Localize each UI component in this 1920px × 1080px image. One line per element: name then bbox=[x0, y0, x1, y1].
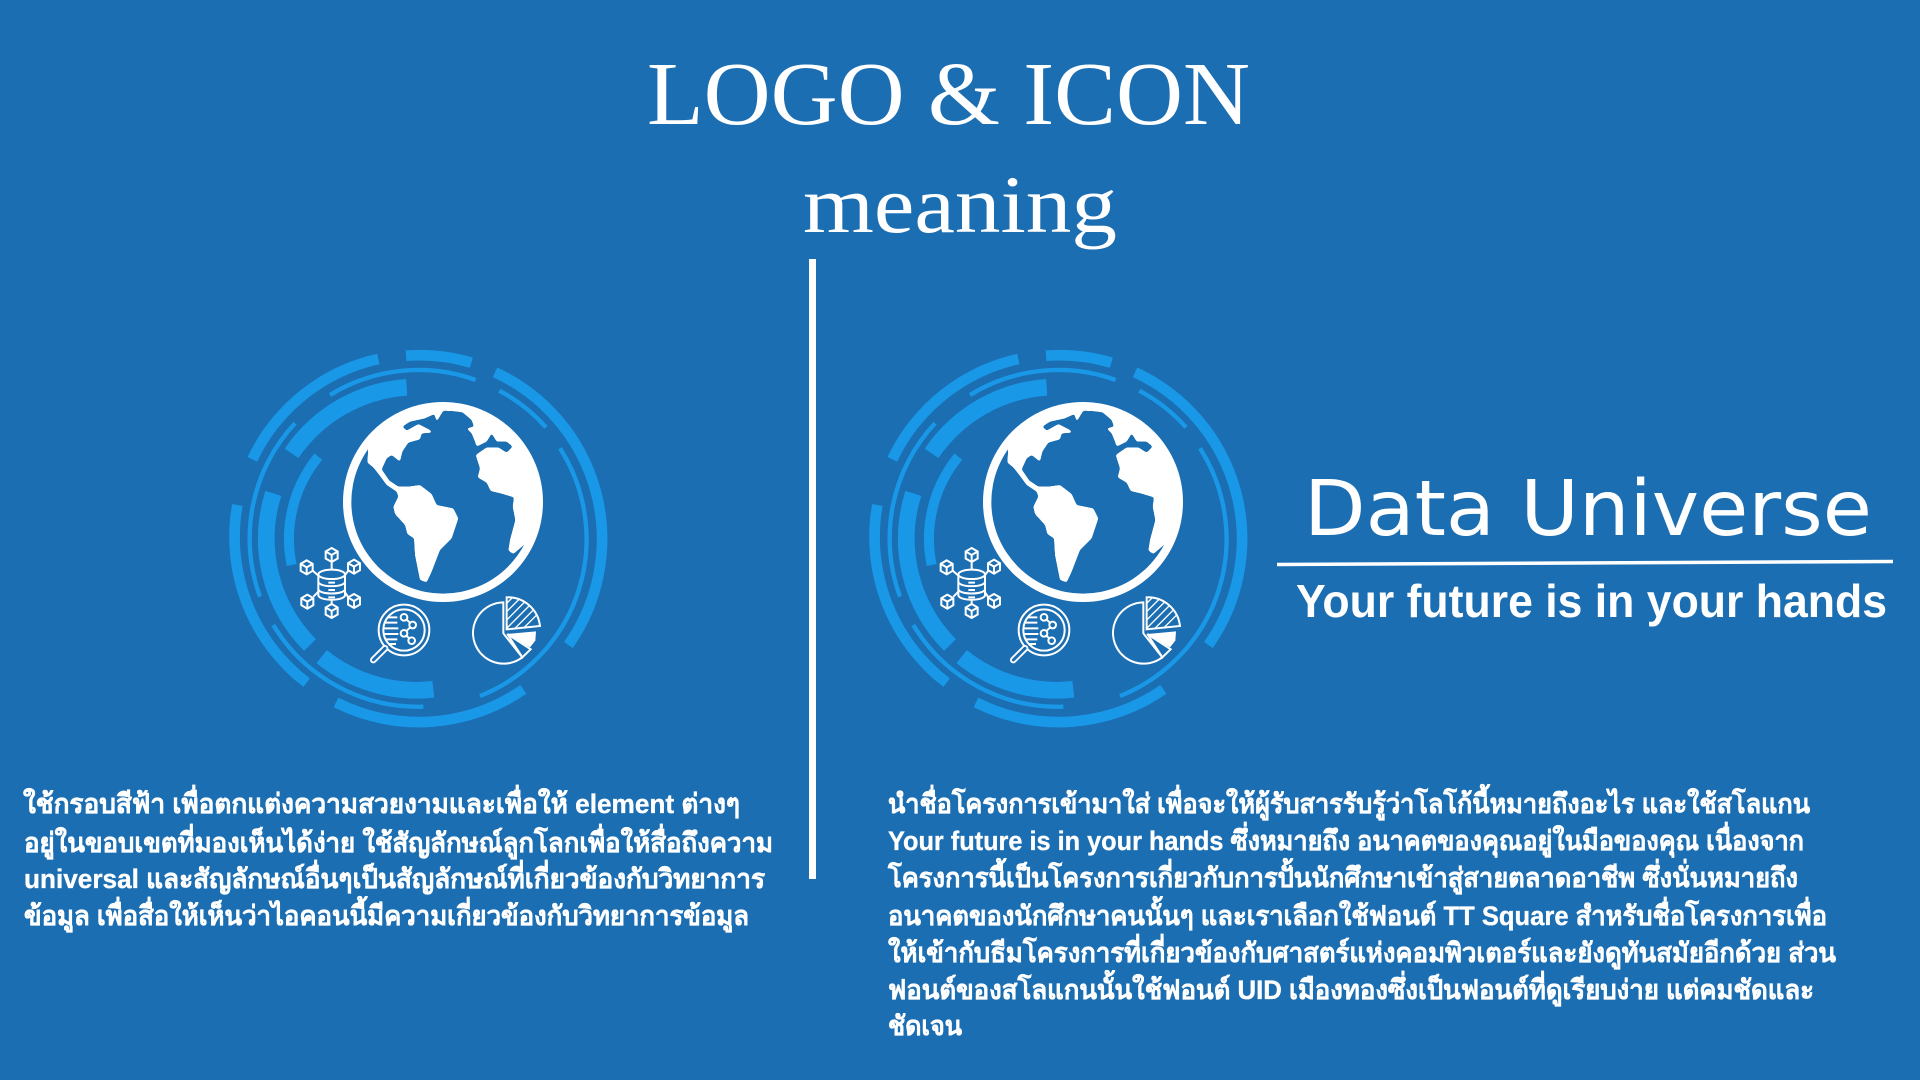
tech rings bbox=[235, 355, 602, 722]
text block: logo explanation: ฟอนต์ของสโลแกนนั้นใช้ฟอนต์ UID เมืองทองซึ่งเป็นฟอนต์ที่ดูเรียบง่าย แต่คมชัดและ bbox=[888, 969, 1814, 1007]
text block: icon explanation: อยู่ในขอบเขตที่มองเห็นได้ง่าย ใช้สัญลักษณ์ลูกโลกเพื่อให้สื่อถึงความ bbox=[24, 823, 773, 860]
icon: database network bbox=[301, 548, 360, 618]
text block: logo explanation: ให้เข้ากับธีมโครงการที่เกี่ยวข้องกับศาสตร์แห่งคอมพิวเตอร์และยังดูทันสมัยอีกด้วย ส่วน bbox=[888, 933, 1837, 970]
icon: pie chart bbox=[473, 595, 552, 664]
icon: right logo globe with rings bbox=[875, 355, 1242, 722]
text block: logo explanation: Your future is in your hands ซึ่งหมายถึง อนาคตของคุณอยู่ในมือของคุณ เนื่องจาก bbox=[888, 821, 1804, 858]
underline bbox=[1277, 562, 1893, 564]
text block: icon explanation bbox=[23, 784, 773, 933]
title bbox=[647, 45, 1250, 250]
text block: logo explanation bbox=[887, 783, 1837, 1041]
text block: icon explanation: ข้อมูล เพื่อสื่อให้เห็นว่าไอคอนนี้มีความเกี่ยวข้องกับวิทยาการข้อมูล bbox=[24, 895, 749, 933]
text block: logo explanation: โครงการนี้เป็นโครงการเกี่ยวกับการปั้นนักศึกษาเข้าสู่สายตลาดอาชีพ ซึ่งนั่นหมายถึง bbox=[887, 857, 1798, 895]
center divider bbox=[809, 259, 816, 879]
project name: Data Universe bbox=[1304, 465, 1872, 554]
text block: icon explanation: universal และสัญลักษณ์อื่นๆเป็นสัญลักษณ์ที่เกี่ยวข้องกับวิทยาการ bbox=[24, 859, 765, 895]
text block: logo explanation: ชัดเจน bbox=[888, 1011, 962, 1041]
text block: logo explanation: อนาคตของนักศึกษาคนนั้นๆ และเราเลือกใช้ฟอนต์ TT Square สำหรับชื่อโครงการเพื่อ bbox=[888, 895, 1827, 931]
text block: logo explanation: นำชื่อโครงการเข้ามาใส่ เพื่อจะให้ผู้รับสารรับรู้ว่าโลโก้นี้หมายถึงอะไร และใช้สโลแกน bbox=[888, 783, 1810, 821]
icon: left logo globe with rings bbox=[235, 355, 602, 722]
globe bbox=[313, 402, 563, 630]
title: LOGO & ICON bbox=[647, 45, 1250, 144]
small icons bbox=[301, 548, 552, 664]
text block: icon explanation: ใช้กรอบสีฟ้า เพื่อตกแต่งความสวยงามและเพื่อให้ element ต่างๆ bbox=[23, 784, 740, 819]
title: meaning bbox=[803, 159, 1117, 250]
slogan: Your future is in your hands bbox=[1296, 575, 1887, 627]
icon: magnifier bbox=[373, 605, 429, 660]
